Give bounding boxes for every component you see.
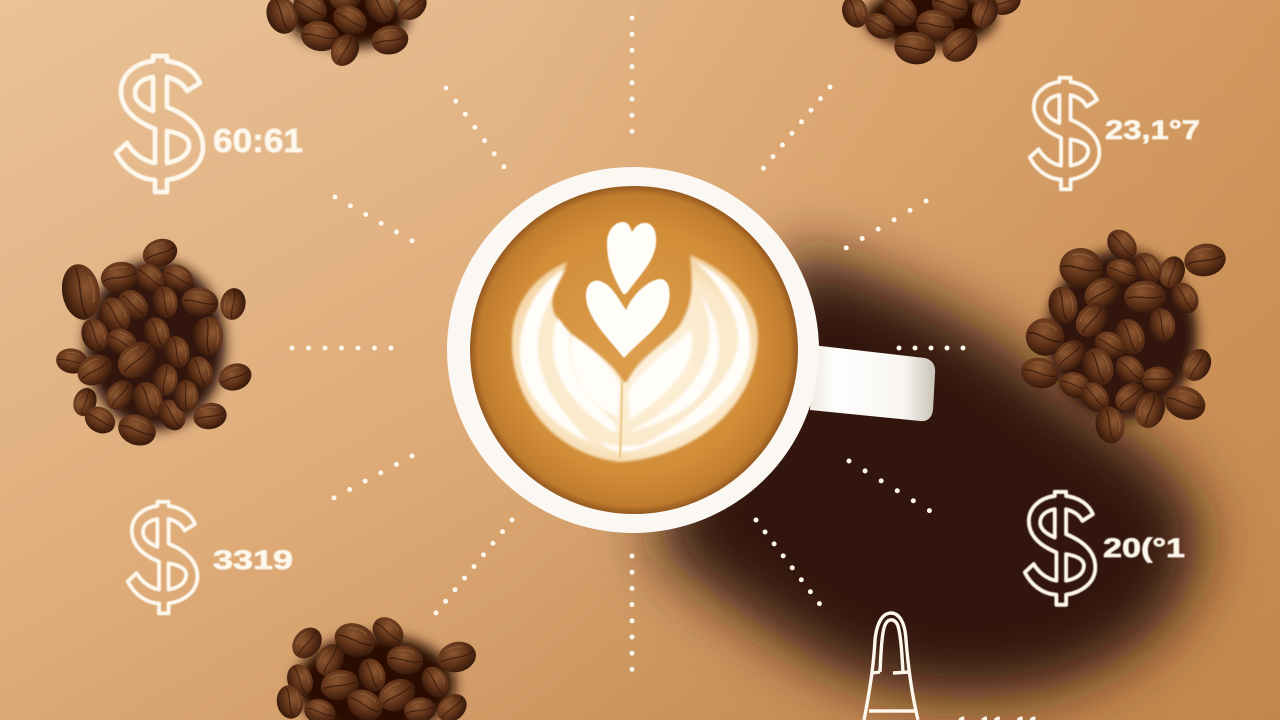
coffee beans: top left	[261, 0, 432, 71]
foam petals	[520, 262, 750, 451]
spoke: west-north-west	[335, 197, 414, 242]
cost marker: top left	[116, 56, 303, 192]
label: 60:61	[213, 122, 303, 159]
cost marker: lower right	[1025, 492, 1185, 605]
spoke: south	[630, 556, 634, 670]
coffee cup	[447, 167, 935, 533]
icon: dollar sign	[1030, 78, 1099, 189]
cup rim	[447, 167, 819, 533]
top heart	[607, 222, 656, 294]
second heart	[586, 279, 670, 358]
spoke: north-west	[446, 88, 504, 167]
cost marker: lower left	[128, 502, 293, 613]
foam tulip base	[512, 255, 758, 462]
icon: dollar sign	[1025, 492, 1095, 605]
icon: dollar sign	[128, 502, 197, 613]
coffee beans: left	[54, 234, 255, 451]
spoke: north-east	[762, 87, 830, 170]
latte art	[512, 222, 758, 462]
coffee beans: top right	[838, 0, 1024, 69]
spoke: east-north-east	[846, 201, 926, 248]
spoke: south-west	[436, 520, 512, 613]
spoke: east-south-east	[849, 461, 930, 511]
cup handle	[810, 345, 935, 421]
spoke: west	[292, 346, 392, 350]
centre stem	[620, 380, 622, 458]
spoke: east	[899, 346, 979, 350]
label: 20(°1	[1103, 533, 1185, 563]
spoke: west-south-west	[330, 456, 412, 500]
coffee beans: right	[1018, 224, 1228, 446]
dotted spokes	[292, 18, 979, 670]
spoke: south-east	[756, 520, 825, 611]
cost marker: top right	[1030, 78, 1200, 189]
label: 23,1°7	[1105, 115, 1200, 145]
coffee surface	[470, 186, 798, 514]
label: 3319	[213, 545, 293, 575]
coffee beans: bottom	[274, 611, 479, 720]
icon: bottle outline, bottom	[864, 613, 918, 720]
spoke: north	[630, 18, 634, 132]
icon: dollar sign	[116, 56, 203, 192]
cup shadow	[650, 250, 1200, 698]
